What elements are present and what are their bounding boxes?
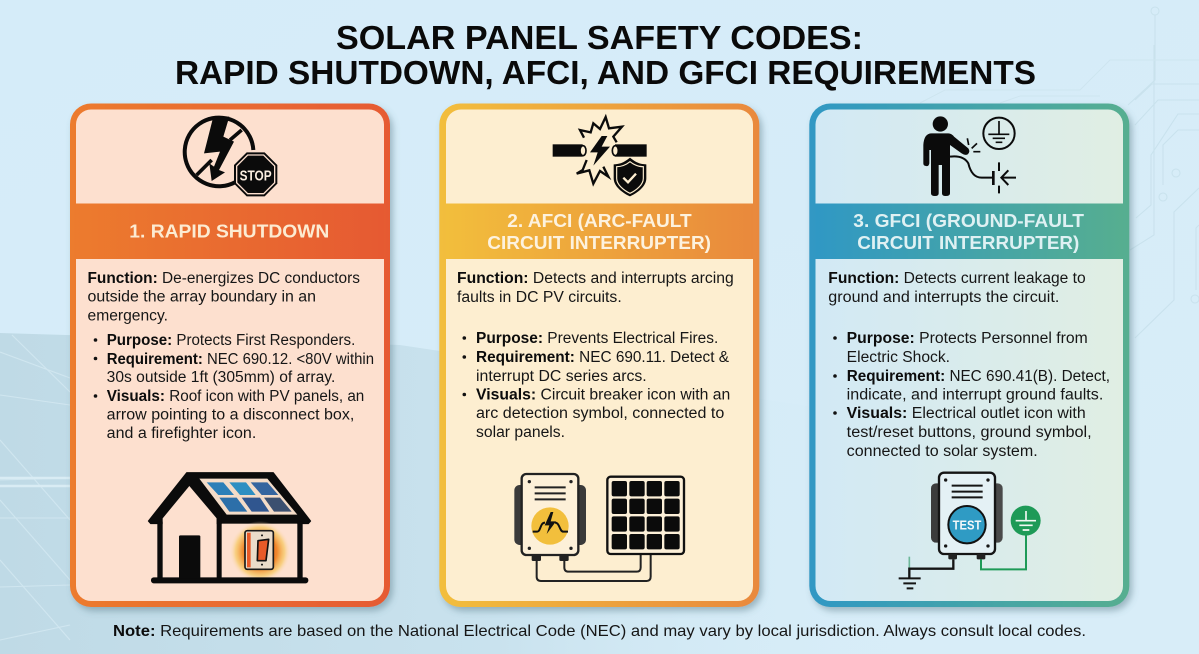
text block: afci details bbox=[457, 270, 734, 441]
text block: rapid shutdown details: arrow pointing to a disconnect box, bbox=[107, 406, 354, 424]
icon: breaker box connected to solar panel bbox=[514, 474, 684, 581]
text block: rapid shutdown details: 30s outside 1ft (305mm) of array. bbox=[107, 369, 335, 386]
panel: rapid shutdown bbox=[70, 104, 390, 607]
heading: gfci bbox=[853, 210, 1085, 253]
text block: rapid shutdown details: Requirement: NEC 690.12. <80V within bbox=[107, 351, 374, 368]
text block: afci details: Purpose: Prevents Electrical Fires. bbox=[476, 330, 718, 347]
heading: rapid shutdown: 1. RAPID SHUTDOWN bbox=[129, 220, 329, 242]
text block: gfci details bbox=[828, 270, 1110, 460]
text block: rapid shutdown details bbox=[88, 270, 374, 442]
icon: arc fault with shield bbox=[553, 117, 647, 196]
panel: afci bbox=[439, 104, 759, 607]
text block: afci details: Requirement: NEC 690.11. Detect & bbox=[476, 349, 730, 366]
text block: gfci details: connected to solar system. bbox=[847, 443, 1038, 460]
heading: gfci: CIRCUIT INTERRUPTER) bbox=[857, 232, 1079, 253]
icon: gfci test unit with ground connections bbox=[899, 473, 1041, 588]
title bbox=[175, 19, 1036, 91]
text block: afci details: interrupt DC series arcs. bbox=[476, 368, 647, 385]
footnote: Note: Requirements are based on the National Electrical Code (NEC) and may vary by local jurisdiction. Always consult local codes. bbox=[113, 623, 1086, 640]
text block: gfci details: indicate, and interrupt ground faults. bbox=[847, 386, 1103, 404]
text block: afci details: arc detection symbol, connected to bbox=[476, 405, 724, 422]
heading: afci bbox=[487, 210, 711, 253]
text block: gfci details: Visuals: Electrical outlet icon with bbox=[847, 405, 1086, 422]
icon: house with solar roof and disconnect switch bbox=[148, 473, 311, 583]
text block: afci details: Visuals: Circuit breaker icon with an bbox=[476, 386, 730, 404]
text block: gfci details: Electric Shock. bbox=[847, 349, 950, 366]
text block: gfci details: Purpose: Protects Personnel from bbox=[847, 330, 1088, 347]
text block: afci details: Function: Detects and interrupts arcing bbox=[457, 270, 734, 287]
text block: afci details: faults in DC PV circuits. bbox=[457, 289, 622, 306]
icon: lightning with stop sign: STOP bbox=[240, 168, 272, 184]
text block: rapid shutdown details: Function: De-energizes DC conductors bbox=[88, 270, 360, 287]
text block: gfci details: test/reset buttons, ground symbol, bbox=[847, 424, 1092, 441]
text block: rapid shutdown details: Visuals: Roof icon with PV panels, an bbox=[107, 388, 364, 405]
text block: gfci details: Function: Detects current leakage to bbox=[828, 270, 1086, 287]
title: RAPID SHUTDOWN, AFCI, AND GFCI REQUIREMENTS bbox=[175, 54, 1036, 91]
panel: gfci bbox=[809, 104, 1129, 607]
heading: afci: 2. AFCI (ARC-FAULT bbox=[507, 210, 692, 231]
text block: gfci details: ground and interrupts the circuit. bbox=[828, 289, 1059, 306]
heading: afci: CIRCUIT INTERRUPTER) bbox=[487, 232, 711, 253]
text block: afci details: solar panels. bbox=[476, 424, 565, 441]
text block: rapid shutdown details: emergency. bbox=[88, 308, 168, 324]
text block: rapid shutdown details: outside the array boundary in an bbox=[88, 289, 316, 306]
icon: lightning with stop sign bbox=[185, 117, 277, 196]
title: SOLAR PANEL SAFETY CODES: bbox=[336, 19, 863, 56]
heading: gfci: 3. GFCI (GROUND-FAULT bbox=[853, 210, 1085, 231]
text block: gfci details: Requirement: NEC 690.41(B). Detect, bbox=[847, 368, 1110, 385]
icon: person with ground fault bbox=[923, 116, 1016, 196]
text block: rapid shutdown details: and a firefighter icon. bbox=[107, 425, 256, 442]
text block: rapid shutdown details: Purpose: Protects First Responders. bbox=[107, 332, 355, 349]
icon: gfci test unit with ground connections: TEST bbox=[953, 519, 982, 533]
